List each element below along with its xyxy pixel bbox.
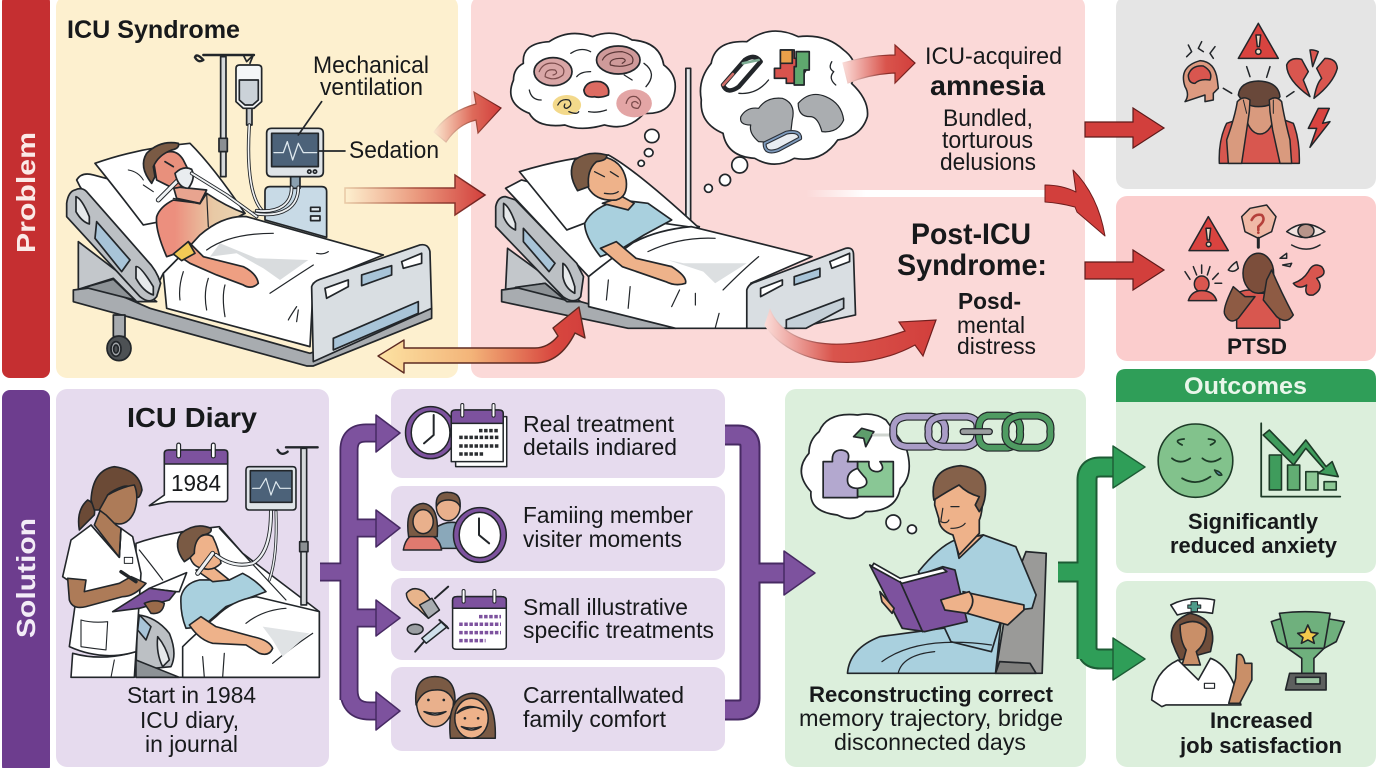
text bbox=[1170, 509, 1338, 558]
text: Carrentallwated bbox=[523, 682, 684, 708]
panel: ICU Syndrome bbox=[56, 0, 458, 378]
panel: family member moments bbox=[391, 486, 725, 571]
text: Post-ICU Syndrome: Post-ICU bbox=[911, 218, 1031, 251]
arrow: two-way feedback bbox=[378, 307, 585, 373]
man bbox=[847, 466, 1036, 673]
icon: overwhelmed person with warning signs bbox=[1183, 23, 1337, 163]
text: diary caption: Start in 1984 bbox=[127, 682, 256, 708]
icons: nurse thumbs up and trophy bbox=[1152, 598, 1344, 707]
text: Post-ICU Syndrome: Syndrome: bbox=[897, 249, 1047, 282]
nurse bbox=[63, 467, 187, 677]
text bbox=[523, 682, 684, 732]
patient bbox=[178, 512, 319, 677]
text: Post-ICU Syndrome bbox=[897, 218, 1047, 359]
text: specific treatments bbox=[523, 617, 714, 643]
text bbox=[523, 502, 693, 552]
text bbox=[523, 411, 677, 460]
text: ICU-acquired amnesia: delusions bbox=[940, 149, 1036, 176]
sidebar: Solution: Solution bbox=[11, 518, 41, 638]
illustration: ventilated patient in ICU bed bbox=[67, 55, 432, 366]
panel: reconstructing memory bbox=[785, 389, 1086, 767]
text bbox=[1179, 708, 1342, 758]
text: 1984 on calendar: 1984 bbox=[171, 470, 221, 496]
icon: PTSD person with symptoms bbox=[1185, 205, 1325, 328]
illustration: patient with thought clouds bbox=[496, 31, 868, 328]
text: Real treatment bbox=[523, 411, 675, 437]
arrow: cloud to amnesia bbox=[843, 45, 915, 83]
divider bbox=[806, 190, 1045, 197]
label: PTSD: PTSD bbox=[1227, 334, 1287, 359]
icons: calm face and falling chart bbox=[1158, 423, 1340, 497]
illustration: nurse writing diary at bedside bbox=[63, 445, 319, 677]
thought cloud: broken memory links bbox=[700, 31, 868, 192]
text: job satisfaction bbox=[1179, 733, 1342, 758]
label: Mechanical ventilation: ventilation bbox=[320, 74, 423, 101]
text: reconstructing caption: disconnected days bbox=[834, 729, 1026, 755]
text: Increased bbox=[1210, 708, 1313, 733]
thought cloud: tangled delusions bbox=[511, 33, 675, 166]
calendar: 1984 speech bubble bbox=[149, 445, 228, 506]
sidebar: Solution bbox=[2, 390, 50, 768]
icon: family and clock bbox=[403, 492, 506, 562]
text: Post-ICU Syndrome: distress bbox=[957, 333, 1036, 359]
arrow: bed to mental distress bbox=[765, 310, 936, 362]
heading: ICU Diary: ICU Diary bbox=[127, 402, 257, 433]
text: reduced anxiety bbox=[1170, 533, 1338, 558]
icon: clock and calendar bbox=[406, 405, 507, 467]
icon: two smiling family faces bbox=[416, 677, 495, 738]
panel: job satisfaction outcome bbox=[1116, 581, 1376, 767]
arrow: items converging to reconstruction bbox=[725, 435, 815, 710]
text: ICU-acquired amnesia bbox=[925, 43, 1062, 176]
text: diary caption: ICU diary, bbox=[140, 707, 239, 733]
text: details indiared bbox=[523, 434, 677, 460]
panel: PTSD bbox=[1116, 196, 1376, 361]
arrow: ICU to patient bbox=[345, 175, 485, 215]
panel: reduced anxiety outcome bbox=[1116, 369, 1376, 573]
header: Outcomes: Outcomes bbox=[1184, 373, 1307, 400]
arrow: to PTSD panel bbox=[1085, 250, 1164, 290]
text: Significantly bbox=[1188, 509, 1319, 534]
text: ICU-acquired amnesia: amnesia bbox=[930, 70, 1045, 101]
icon: medications and calendar bbox=[406, 587, 506, 652]
text: ICU-acquired amnesia: Bundled, bbox=[943, 105, 1033, 132]
header: Outcomes bbox=[1116, 369, 1376, 402]
label: Sedation: Sedation bbox=[349, 137, 439, 164]
panel: illustrative specific treatments bbox=[391, 578, 725, 660]
text: ICU-acquired amnesia: ICU-acquired bbox=[925, 43, 1062, 70]
text: reconstructing caption: memory trajectory, bridge bbox=[799, 705, 1063, 731]
panel: ICU delusions and Post-ICU Syndrome bbox=[471, 0, 1085, 378]
panel: ICU Diary bbox=[56, 389, 329, 767]
label: Mechanical ventilation bbox=[313, 52, 429, 101]
panel: real treatment details bbox=[391, 389, 725, 478]
arrows: reconstruction branching to outcomes bbox=[1058, 446, 1145, 680]
panel: family comfort bbox=[391, 667, 725, 751]
text: family comfort bbox=[523, 706, 667, 732]
text bbox=[523, 594, 714, 643]
text: diary caption bbox=[127, 682, 256, 757]
heading: ICU Syndrome: ICU Syndrome bbox=[67, 16, 240, 44]
arrow: ventilation to delusions bbox=[434, 92, 501, 142]
panel: distress symptoms bbox=[1116, 0, 1376, 189]
text: visiter moments bbox=[523, 526, 682, 552]
arrow: amnesia to PTSD bbox=[1045, 170, 1105, 236]
text: Famiing member bbox=[523, 502, 693, 528]
text: Post-ICU Syndrome: Posd- bbox=[958, 288, 1021, 314]
text: ICU-acquired amnesia: torturous bbox=[942, 127, 1033, 154]
text: Small illustrative bbox=[523, 594, 688, 620]
bed and equipment bbox=[136, 447, 319, 677]
chain: broken memory links bbox=[893, 416, 1051, 448]
arrow: to distress panel bbox=[1085, 108, 1164, 148]
arrows: diary branching to four items bbox=[320, 415, 400, 730]
thought cloud with puzzle bbox=[801, 414, 916, 534]
sidebar: Problem: Problem bbox=[11, 132, 41, 253]
text: diary caption: in journal bbox=[145, 731, 238, 757]
label: Mechanical ventilation: Mechanical bbox=[313, 52, 429, 79]
chair bbox=[996, 552, 1046, 673]
sidebar: Problem bbox=[2, 0, 50, 378]
text: reconstructing caption bbox=[799, 682, 1063, 755]
illustration: bed with sleeping patient bbox=[496, 68, 856, 328]
illustration: patient reading diary bbox=[801, 414, 1051, 673]
text: Post-ICU Syndrome: mental bbox=[957, 312, 1025, 338]
text: reconstructing caption: Reconstructing correct bbox=[809, 682, 1054, 707]
